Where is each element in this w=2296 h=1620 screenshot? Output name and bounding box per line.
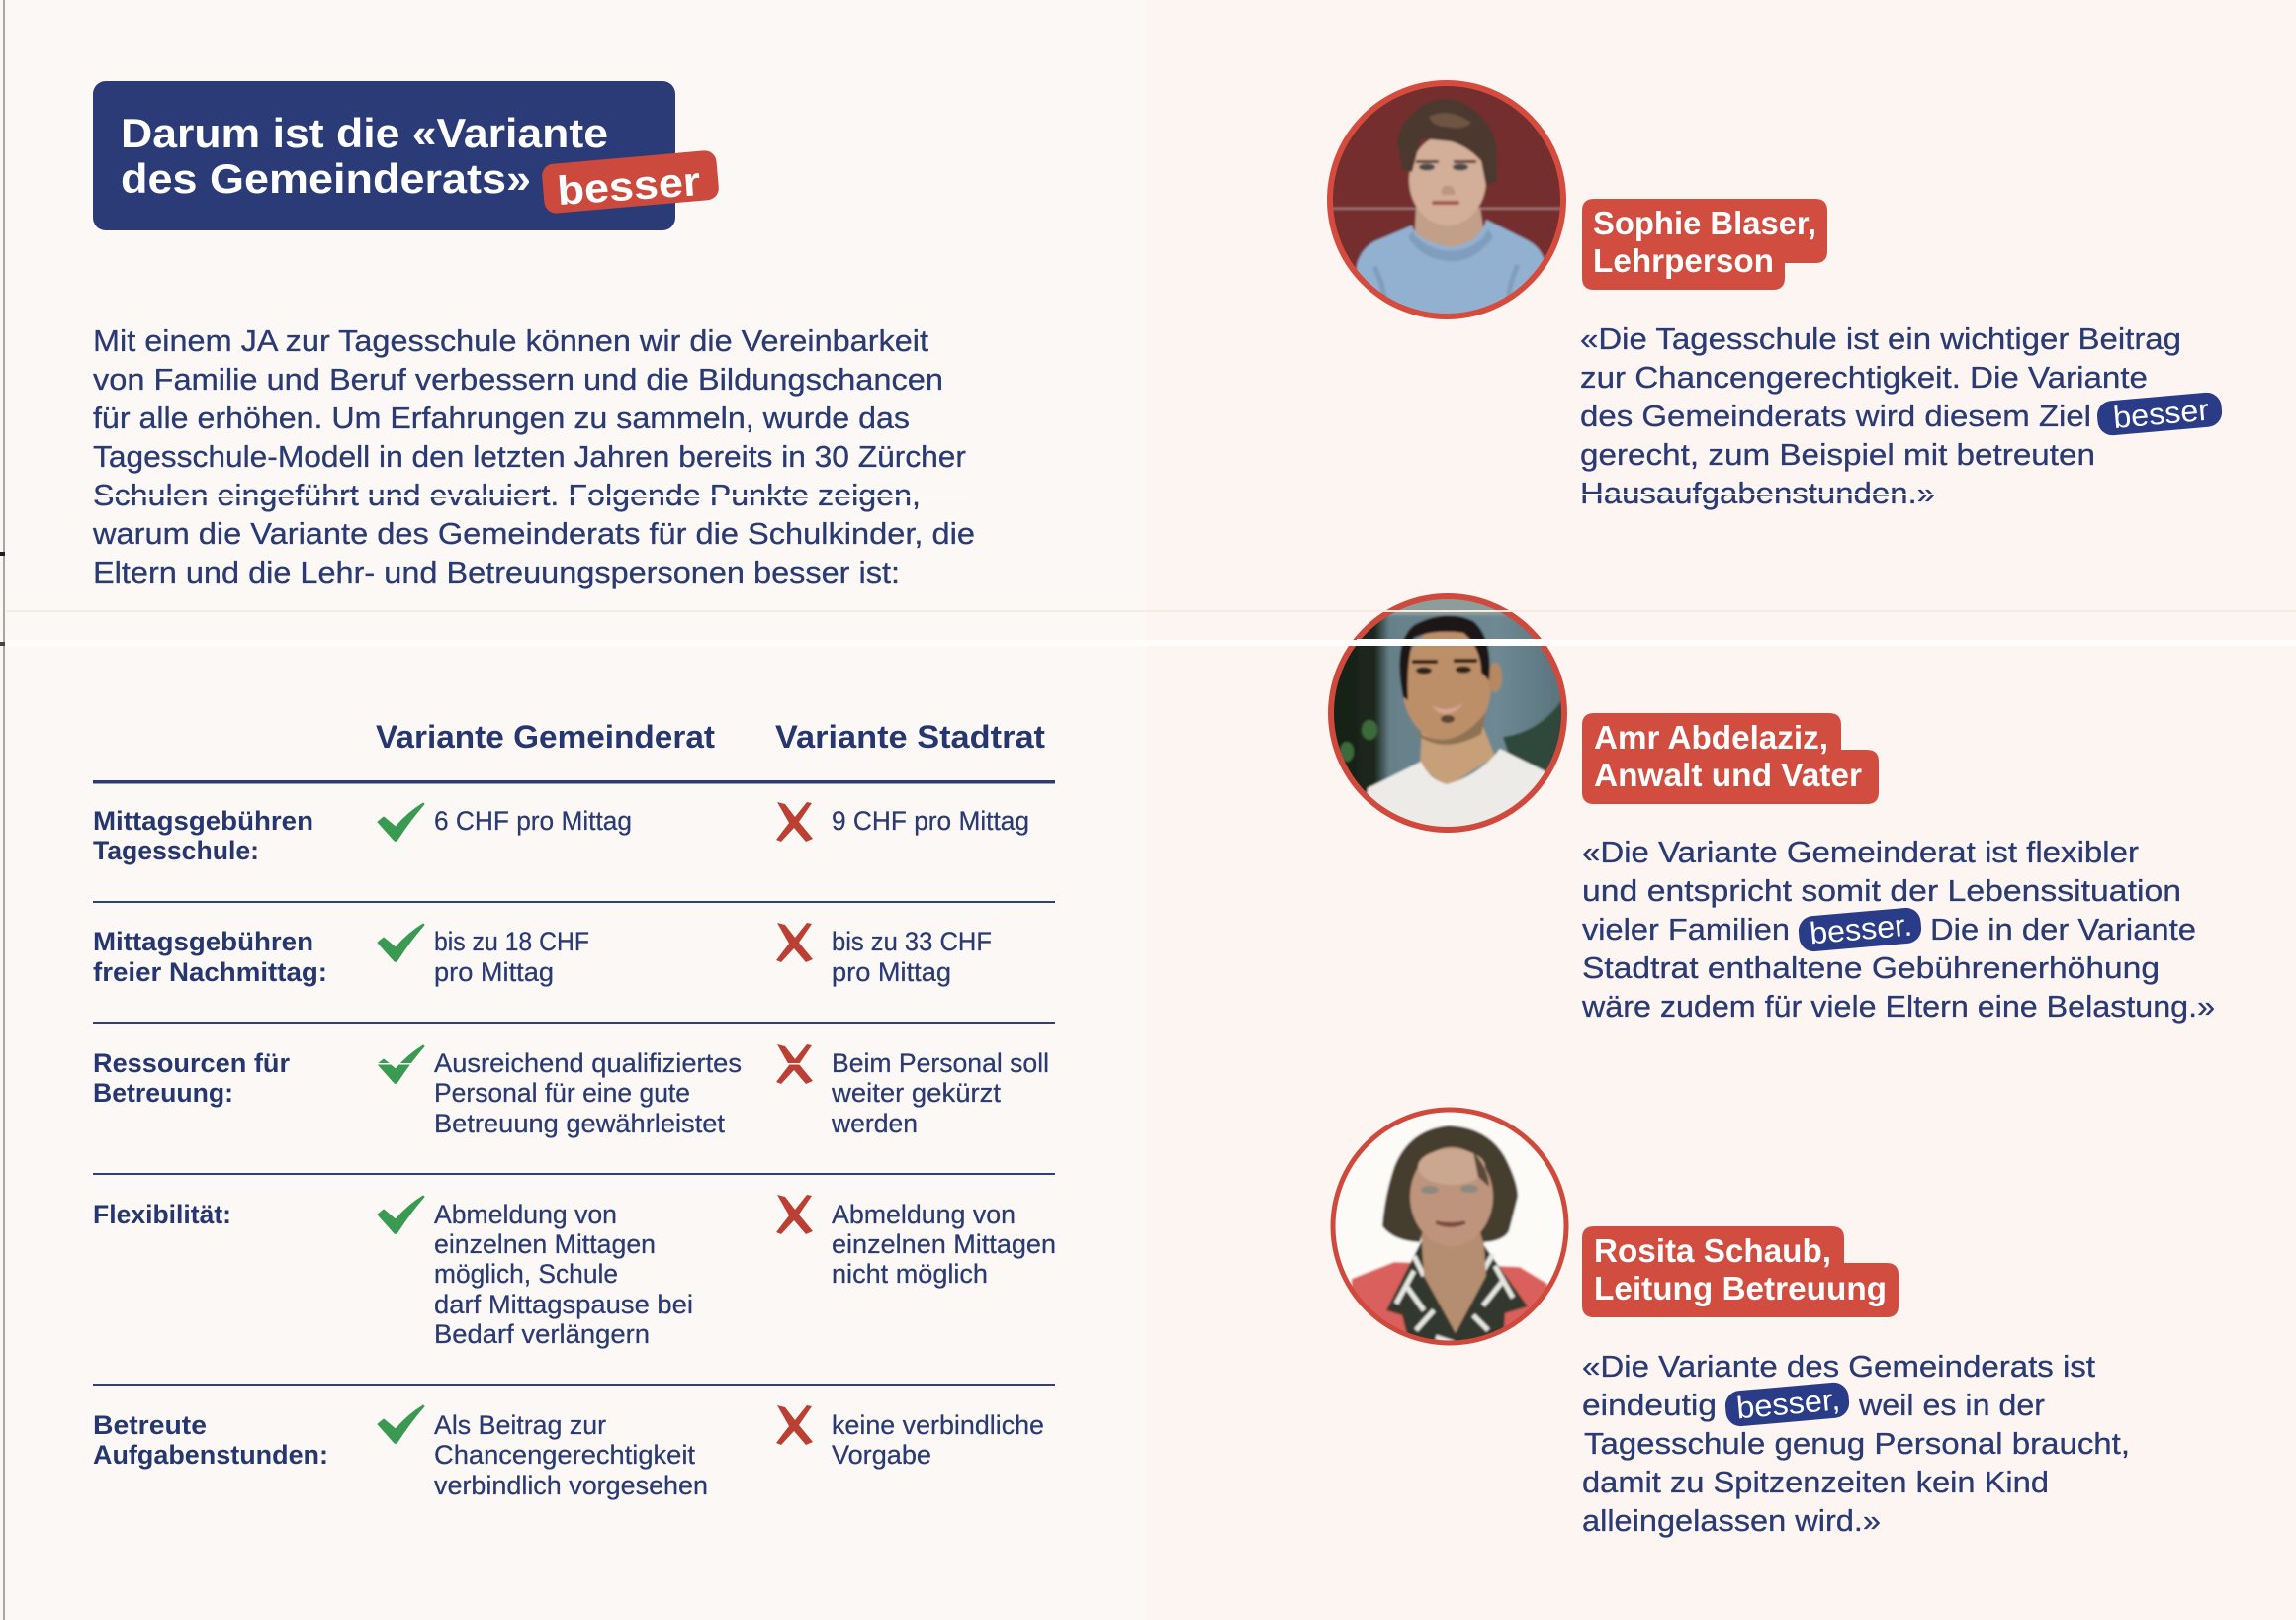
title banner: Darum ist die «Variante [121,110,608,156]
table column headings [376,719,1045,755]
row: Flexibilität: Flexibilität: [93,1200,231,1229]
intro paragraph: von Familie und Beruf verbessern und die Bildungschancen [93,362,943,397]
highlight: besser,: besser, [1735,1382,1841,1425]
row: Mittagsgebühren Tagesschule: Mittagsgebühren [93,806,313,836]
highlight: besser.: besser. [1809,907,1913,950]
portrait: Amr Abdelaziz [1325,593,1572,841]
row: Flexibilität: Abmeldung von [832,1200,1016,1229]
name tag: Sophie Blaser: Lehrperson [1593,242,1774,279]
name tag: Sophie Blaser [1582,199,1827,290]
intro paragraph: Eltern und die Lehr- und Betreuungspersonen besser ist: [93,555,900,589]
quote: Rosita Schaub: «Die Variante des Gemeinderats ist [1582,1349,2095,1384]
name tag: Rosita Schaub: Leitung Betreuung [1594,1270,1887,1306]
row: Mittagsgebühren freier Nachmittag: bis zu 18 CHF [434,927,589,956]
row: Ressourcen für Betreuung: weiter gekürzt [831,1078,1001,1108]
row: Betreute Aufgabenstunden [93,1405,1044,1500]
quote: Rosita Schaub [1582,1349,2130,1538]
row: Betreute Aufgabenstunden: keine verbindliche [832,1410,1044,1440]
row: Flexibilität: einzelnen Mittagen [832,1229,1056,1259]
quote: Amr Abdelaziz: wäre zudem für viele Eltern eine Belastung.» [1581,989,2215,1024]
quote: Amr Abdelaziz: Stadtrat enthaltene Gebührenerhöhung [1582,950,2160,985]
row: Ressourcen für Betreuung: Beim Personal soll [832,1048,1049,1078]
row: Flexibilität: möglich, Schule [434,1259,618,1289]
row: Betreute Aufgabenstunden: Betreute [93,1410,207,1440]
row: Ressourcen für Betreuung: werden [831,1109,918,1138]
intro paragraph: für alle erhöhen. Um Erfahrungen zu sammeln, wurde das [93,401,910,435]
quote: Rosita Schaub: weil es in der [1858,1388,2045,1422]
row: Flexibilität: einzelnen Mittagen [434,1229,656,1259]
quote: Amr Abdelaziz: «Die Variante Gemeinderat ist flexibler [1582,835,2139,869]
row: Mittagsgebühren freier Nachmittag: bis zu 33 CHF [832,927,992,956]
row: Mittagsgebühren freier Nachmittag: Mittagsgebühren [93,927,313,956]
title banner [93,81,720,230]
quote: Sophie Blaser: «Die Tagesschule ist ein wichtiger Beitrag [1580,321,2181,356]
row: Mittagsgebühren Tagesschule [93,802,1029,865]
row: Mittagsgebühren Tagesschule: Tagesschule: [93,836,259,865]
row: Betreute Aufgabenstunden: verbindlich vorgesehen [434,1471,708,1500]
table column headings: Variante Stadtrat [775,719,1045,755]
name tag: Amr Abdelaziz: Amr Abdelaziz, [1594,719,1828,756]
row: Flexibilität: Bedarf verlängern [434,1319,650,1349]
comparison table [93,719,1056,1500]
name tag: Rosita Schaub: Rosita Schaub, [1594,1232,1831,1269]
row: Ressourcen für Betreuung: Betreuung gewährleistet [434,1109,726,1138]
row: Flexibilität: nicht möglich [832,1259,988,1289]
row: Mittagsgebühren freier Nachmittag: pro Mittag [832,957,951,987]
quote: Sophie Blaser: des Gemeinderats wird diesem Ziel [1580,399,2091,433]
row: Betreute Aufgabenstunden: Chancengerechtigkeit [434,1440,695,1470]
portrait: Rosita Schaub [1325,1106,1572,1350]
portrait: Sophie Blaser [1325,79,1572,326]
row: Ressourcen für Betreuung: Ressourcen für [93,1048,290,1078]
row: Ressourcen für Betreuung: Personal für eine gute [434,1078,690,1108]
intro paragraph: Tagesschule-Modell in den letzten Jahren bereits in 30 Zürcher [93,439,966,474]
row: Betreute Aufgabenstunden: Als Beitrag zur [434,1410,606,1440]
intro paragraph: warum die Variante des Gemeinderats für die Schulkinder, die [92,516,975,551]
quote: Sophie Blaser: gerecht, zum Beispiel mit betreuten [1580,437,2095,472]
quote: Amr Abdelaziz: vieler Familien [1582,912,1790,946]
row: Mittagsgebühren freier Nachmittag: freier Nachmittag: [93,957,327,987]
name tag: Rosita Schaub [1582,1226,1899,1317]
quote: Rosita Schaub: damit zu Spitzenzeiten kein Kind [1582,1465,2049,1499]
table column headings: Variante Gemeinderat [376,719,715,755]
name tag: Sophie Blaser: Sophie Blaser, [1593,205,1816,241]
title banner: besser [556,158,702,214]
highlight: besser: besser [2112,393,2210,435]
intro paragraph [92,323,975,589]
intro paragraph: Mit einem JA zur Tagesschule können wir die Vereinbarkeit [93,323,928,358]
row: Flexibilität: Abmeldung von [434,1200,617,1229]
row: Ressourcen für Betreuung: Ausreichend qualifiziertes [434,1048,742,1078]
intro paragraph: Schulen eingeführt und evaluiert. Folgende Punkte zeigen, [93,478,921,512]
row: Mittagsgebühren freier Nachmittag: pro Mittag [434,957,554,987]
quote: Amr Abdelaziz: Die in der Variante [1930,912,2196,946]
row: Betreute Aufgabenstunden: Vorgabe [832,1440,931,1470]
quote: Rosita Schaub: alleingelassen wird.» [1582,1503,1881,1538]
name tag: Amr Abdelaziz: Anwalt und Vater [1594,757,1862,793]
quote: Sophie Blaser [1580,321,2223,510]
row: Flexibilität [93,1195,1056,1349]
row: Mittagsgebühren freier Nachmittag [93,923,992,987]
row: Flexibilität: darf Mittagspause bei [434,1290,693,1319]
highlight: besser [2096,392,2223,436]
title banner: des Gemeinderats» [121,155,531,202]
row: Betreute Aufgabenstunden: Aufgabenstunden: [93,1440,328,1470]
name tag: Amr Abdelaziz [1582,713,1879,804]
row: Mittagsgebühren Tagesschule: 9 CHF pro Mittag [832,806,1029,836]
row: Ressourcen für Betreuung: Betreuung: [93,1078,233,1108]
quote: Rosita Schaub: Tagesschule genug Personal braucht, [1584,1426,2130,1461]
quote: Amr Abdelaziz: und entspricht somit der Lebenssituation [1582,873,2181,908]
quote: Rosita Schaub: eindeutig [1582,1388,1717,1422]
quote: Sophie Blaser: Hausaufgabenstunden.» [1580,476,1935,510]
quote: Sophie Blaser: zur Chancengerechtigkeit. Die Variante [1580,360,2148,395]
row: Mittagsgebühren Tagesschule: 6 CHF pro Mittag [434,806,632,836]
quote: Amr Abdelaziz [1581,835,2215,1024]
row: Ressourcen für Betreuung [93,1044,1049,1138]
